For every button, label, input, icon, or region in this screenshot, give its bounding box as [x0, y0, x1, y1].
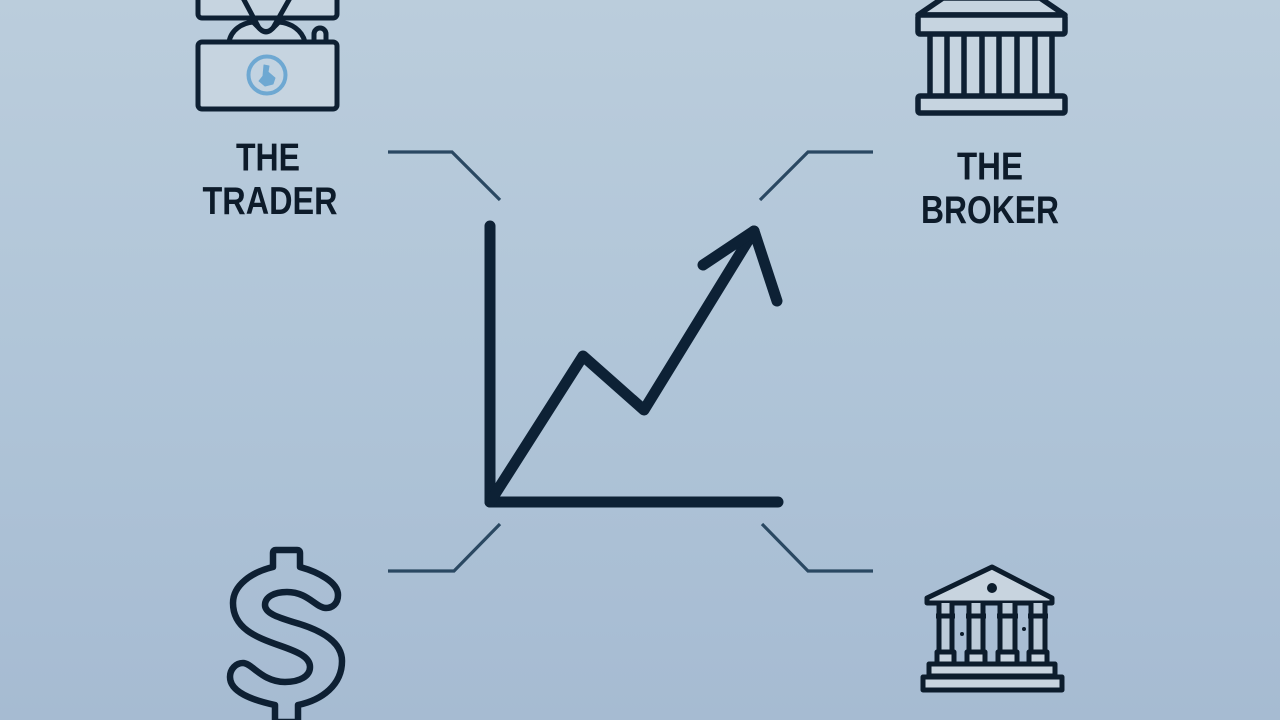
connector: top right	[760, 152, 873, 200]
icon: dollar sign	[230, 550, 342, 720]
connector: top left	[388, 152, 500, 200]
label: the trader: THE	[236, 136, 300, 180]
label: trader line two: TRADER	[202, 180, 338, 223]
label: the broker: THE	[957, 146, 1023, 188]
icon: bank building	[923, 567, 1062, 690]
label: broker line two: BROKER	[921, 189, 1059, 232]
connector: bottom left	[388, 524, 500, 571]
icon: broker building	[918, 0, 1065, 113]
icon: trader at desk	[198, 0, 337, 109]
connector: bottom right	[762, 524, 873, 571]
central rising line chart with arrow	[490, 226, 778, 502]
